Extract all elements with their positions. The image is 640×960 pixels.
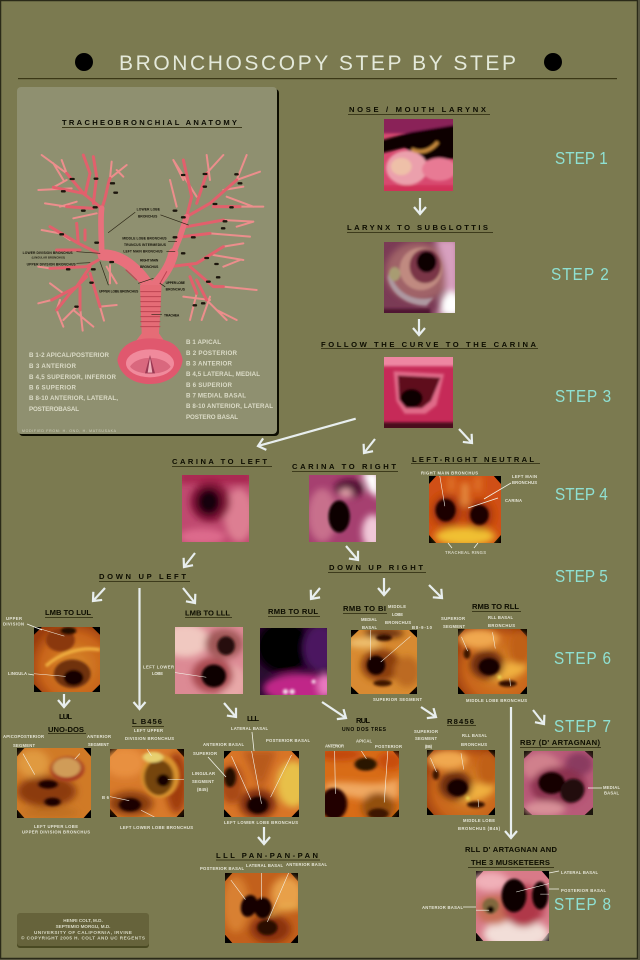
arrow: to rb7 [533,710,544,724]
uno-dos labels: LEFT UPPER LOBE [34,824,78,829]
photo: rb7 [524,751,593,815]
photo: rul [325,751,399,817]
arrow [93,588,105,601]
rll labels: SEGMENT [443,624,465,629]
large bronchi [101,208,187,288]
lul labels: UPPER [6,616,22,621]
r8456 labels: SUPERIOR [414,729,438,734]
arrow [383,578,385,595]
arrow: long to L B456 [138,588,141,709]
tree labels: UPPER LOBE [166,281,186,285]
arrow: carina to left [258,419,356,446]
rul labels [325,738,402,749]
tree labels: RIGHT MAIN [140,258,159,262]
photo: rmb to bi [351,630,417,694]
photo: rmb to rul [260,628,327,695]
photo: carina to left [182,475,249,542]
step 2: STEP 2 [551,264,609,284]
tree labels: LOWER DIVISION BRONCHUS [23,251,73,255]
tree labels: BRONCHUS [166,288,186,292]
tree labels: TRUNCUS INTERMEDIUS [124,243,167,247]
rll d'artagnan labels: POSTERIOR BASAL [561,888,606,893]
lll labels: SUPERIOR [193,751,217,756]
rb7 label: MEDIAL [603,785,620,790]
step 4: STEP 4 [555,484,608,504]
arrow: to down up right [346,546,358,560]
step 1: STEP 1 [555,148,608,168]
r8456 labels: BRONCHUS (B45) [458,826,501,831]
step labels [551,148,611,914]
credit box: © COPYRIGHT 2005 H. COLT AND UC REGENTS [21,934,145,940]
photo: rll d'artagnan [476,871,549,941]
left segment list: B 8-10 ANTERIOR, LATERAL, [29,395,118,402]
bi labels: MIDDLE [388,604,406,609]
neutral labels: CARINA [505,498,522,503]
title bullet left [75,53,93,71]
rll d'artagnan labels: ANTERIOR BASAL [422,905,463,910]
tree labels: UPPER LOBE BRONCHUS [99,289,139,293]
arrow [419,198,421,214]
right segment list: B 8-10 ANTERIOR, LATERAL [186,403,273,410]
rll d'artagnan labels [422,870,606,910]
anatomy pointer lines [77,212,188,315]
r8456 labels: (B6) [425,744,433,749]
main branches [50,155,240,310]
heading: rll d'artagnan and the 3 musketeers: THE 3 MUSKETEERS [471,858,550,867]
bi labels: LOBE [392,612,403,617]
lll labels: ANTERIOR BASAL [203,742,244,747]
uno-dos labels: SEGMENT [13,743,35,748]
pan-pan-pan labels [200,862,327,871]
photo: lmb to lul [34,627,100,692]
neutral labels: TRACHEAL RINGS [445,550,486,555]
b456 labels: LINGULAR [192,771,215,776]
rul labels: ANTERIOR [325,744,344,748]
photo: left-right neutral [429,476,501,543]
uno-dos labels: APICOPOSTERIOR [3,734,44,739]
bi labels: SUPERIOR SEGMENT [373,697,422,702]
heading: carina to right: CARINA TO RIGHT [292,462,396,471]
bi labels [361,604,433,702]
heading: nose / mouth larynx: NOSE / MOUTH LARYNX [349,105,486,114]
heading: lul: LUL [59,712,72,721]
panel: tracheobronchial anatomy [17,87,279,436]
arrow [184,553,195,567]
r8456 labels: SEGMENT [415,736,437,741]
tree labels: (LINGULAR BRONCHUS) [32,256,65,260]
rll labels: SUPERIOR [441,616,465,621]
right segment list [186,339,273,421]
heading: lmb to lll: LMB TO LLL [185,608,230,618]
credit box: SEPTEMIO MORGU, M.D. [56,924,110,929]
bi labels: MEDIAL [361,617,377,622]
uno-dos labels: UPPER DIVISION BRONCHUS [22,830,90,834]
neutral labels: RIGHT MAIN BRONCHUS [421,470,478,476]
tree labels: LOWER LOBE [137,208,161,212]
title bullet right [544,53,562,71]
pan-pan-pan labels: ANTERIOR BASAL [286,862,327,867]
heading: lll pan-pan-pan: LLL PAN-PAN-PAN [216,851,318,860]
heading: carina to left: CARINA TO LEFT [172,457,267,466]
r8456 labels: MIDDLE LOBE [463,818,495,823]
arrow [224,703,236,717]
heading: l b456: L B456 [132,717,162,726]
arrow [429,585,442,598]
photo: lmb to lll [175,627,243,694]
step 5: STEP 5 [555,566,608,586]
rll labels: MIDDLE LOBE BRONCHUS [466,698,527,703]
lul labels: DIVISION [3,622,24,627]
neutral labels: BRONCHUS [512,480,537,485]
tree labels [23,208,186,318]
right segment list: B 4,5 LATERAL, MEDIAL [186,371,260,378]
title rule [18,78,617,79]
lll labels: LEFT LOWER [143,664,174,670]
branch label tags [60,174,241,307]
pan-pan-pan labels: LATERAL BASAL [246,863,283,868]
tree labels: BRONCHUS [140,265,159,269]
heading: uno-dos: UNO-DOS [48,725,84,734]
left segment list [29,352,118,413]
larynx [117,338,183,384]
uno-dos labels: SEGMENT [88,742,109,747]
heading: rmb to rul: RMB TO RUL [268,607,318,616]
photo: lul uno-dos [17,748,91,818]
b456 labels: B6 [102,795,110,800]
b456 labels: LEFT LOWER LOBE BRONCHUS [120,825,193,830]
b456 labels: (B45) [197,787,209,792]
rll labels: BRONCHUS [488,623,515,628]
bi labels: B8-9-10 [412,625,433,630]
right segment list: B 2 POSTERIOR [186,350,238,357]
uno-dos labels [3,734,111,834]
b456 labels: DIVISION BRONCHUS [125,736,174,741]
credit box [17,913,149,948]
photo: rmb to rll [458,629,527,694]
photo: larynx to subglottis [384,242,455,313]
tree labels: UPPER DIVISION BRONCHUS [27,262,76,266]
arrow [418,319,420,335]
bi labels: BRONCHUS [385,620,411,625]
rb7 label: BASAL [604,790,619,796]
bi labels: BASAL [362,625,377,630]
arrow [183,588,195,603]
step 7: STEP 7 [554,716,611,736]
trachea [126,270,168,347]
tree labels: TRACHEA [164,314,180,318]
rll d'artagnan labels: LATERAL BASAL [561,870,598,875]
heading: lll: LLL [247,714,259,723]
r8456 labels: BRONCHUS [461,742,487,747]
r8456 labels: RLL BASAL [462,733,487,738]
tree labels: MIDDLE LOBE BRONCHUS [122,236,167,240]
step 6: STEP 6 [554,648,611,668]
panel heading: TRACHEOBRONCHIAL ANATOMY [62,118,237,127]
arrow [263,827,265,844]
heading: larynx to subglottis: LARYNX TO SUBGLOTTIS [347,223,488,232]
photo: carina [384,357,453,428]
right segment list: B 6 SUPERIOR [186,382,233,389]
left segment list: B 1-2 APICAL/POSTERIOR [29,352,110,359]
photo: l b456 [110,749,184,817]
heading: rmb to rll: RMB TO RLL [472,602,519,611]
heading: rul: RUL [356,716,370,725]
lll labels: LATERAL BASAL [231,726,268,731]
arrow [322,702,346,718]
heading: r8456: R8456 [447,717,474,726]
photo: nose mouth larynx [384,119,453,191]
heading: lmb to lul: LMB TO LUL [45,608,91,617]
b456 labels: SEGMENT [192,779,214,784]
b456 labels: LEFT UPPER [134,728,163,733]
credit box: HENRI COLT, M.D. [63,918,103,923]
sub heading: uno dos tres: UNO DOS TRES [342,727,387,733]
lll labels: LOBE [152,671,163,676]
heading: rll d'artagnan and the 3 musketeers [465,845,558,868]
heading: down up left: DOWN UP LEFT [99,572,186,581]
title: BRONCHOSCOPY STEP BY STEP [119,52,516,75]
left segment list: POSTEROBASAL [29,406,79,413]
neutral labels [421,470,537,555]
heading: rmb to bi: RMB TO BI [343,604,386,613]
credit box: UNIVERSITY OF CALIFORNIA, IRVINE [34,930,132,935]
right segment list: POSTERO BASAL [186,414,238,421]
uno-dos labels: ANTERIOR [87,734,111,739]
arrow [421,707,436,717]
photo: lll [224,751,299,817]
tree labels: LEFT MAIN BRONCHUS [123,250,163,254]
rul labels: POSTERIOR [375,744,402,749]
step 8: STEP 8 [554,894,611,914]
thin pale branches [38,155,263,331]
arrow: carina to right [364,439,375,453]
heading: rb7 d'artagnan: RB7 (D' ARTAGNAN) [520,738,600,747]
arrow [63,694,65,707]
source credit: MODIFIED FROM: H. ONO, H. MATSUSAKA [22,429,117,433]
arrow: long to rll d'artagnan [510,707,512,838]
lll labels [143,664,174,676]
right segment list: B 3 ANTERIOR [186,360,233,368]
lul labels [3,616,42,676]
heading: rll d'artagnan and the 3 musketeers: RLL D' ARTAGNAN AND [465,845,558,854]
arrow: left-right neutral [459,429,472,443]
lll labels: LEFT LOWER LOBE BRONCHUS [224,820,298,825]
lll labels [193,726,310,825]
rll labels: RLL BASAL [488,615,513,620]
heading: follow the curve to the carina: FOLLOW THE CURVE TO THE CARINA [321,340,537,349]
rb7 label [588,785,620,796]
arrow [311,588,320,599]
b456 labels [102,728,215,830]
rul labels: APICAL [356,738,372,744]
heading: left-right neutral: LEFT-RIGHT NEUTRAL [412,455,534,464]
left segment list: B 3 ANTERIOR [29,363,77,370]
photo: lll pan-pan-pan [225,873,298,943]
heading: down up right: DOWN UP RIGHT [329,563,423,572]
tree labels: BRONCHUS [138,214,158,218]
bronchial tree illustration [23,155,263,384]
left segment list: B 6 SUPERIOR [29,384,77,392]
right segment list: B 7 MEDIAL BASAL [186,392,246,400]
neutral labels: LEFT MAIN [512,474,537,479]
pan-pan-pan labels: POSTERIOR BASAL [200,866,244,871]
right segment list: B 1 APICAL [186,339,221,346]
r8456 labels [414,729,501,831]
photo: r8456 [427,750,495,815]
rll labels [441,615,527,703]
lul labels: LINGULA [8,671,27,676]
photo: carina to right [309,475,376,542]
left segment list: B 4,5 SUPERIOR, INFERIOR [29,374,117,381]
step 3: STEP 3 [555,386,611,406]
lll labels: POSTERIOR BASAL [266,738,310,743]
